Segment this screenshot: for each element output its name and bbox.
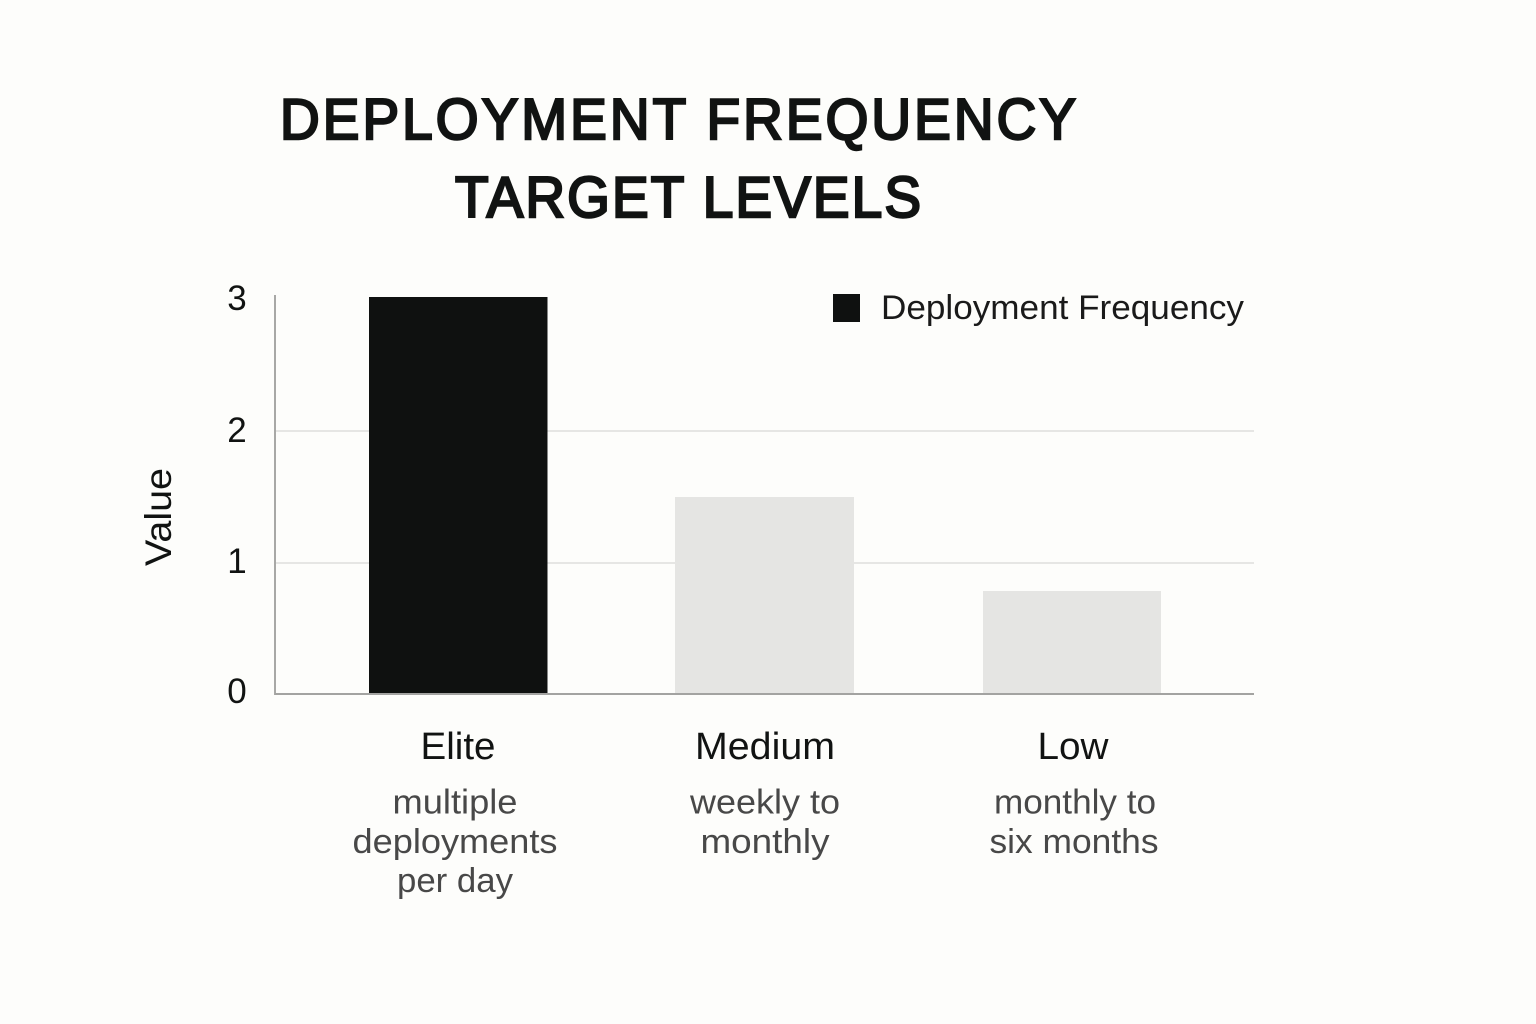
category: Elite: multiple [392,784,518,822]
title: DEPLOYMENT FREQUENCY [280,87,1076,151]
category: Medium: monthly [700,823,830,861]
y-axis tick labels: 2 [227,411,247,450]
y-axis tick labels: 0 [227,672,247,711]
title: TARGET LEVELS [455,165,921,229]
category: Low: monthly to [994,784,1156,822]
legend: Deployment Frequency [881,289,1244,327]
category: Medium: weekly to [689,784,840,822]
category: Medium: Medium [695,726,835,768]
y-axis tick labels [227,279,247,711]
y-axis tick labels: 1 [227,542,247,581]
title [280,87,1076,229]
category: Elite [352,726,558,900]
category: Medium [689,726,840,861]
bar: Medium [675,497,854,694]
bar: Elite [369,297,548,694]
y-axis title: Value [138,468,179,566]
category: Low [990,726,1158,861]
category: Low: Low [1038,726,1109,768]
category: Elite: deployments [352,823,558,861]
category: Elite: per day [397,862,513,900]
category: Elite: Elite [420,726,496,768]
bar: Low [983,591,1161,694]
category: Low: six months [990,823,1158,861]
y-axis tick labels: 3 [227,279,247,318]
bar chart [138,279,1254,711]
